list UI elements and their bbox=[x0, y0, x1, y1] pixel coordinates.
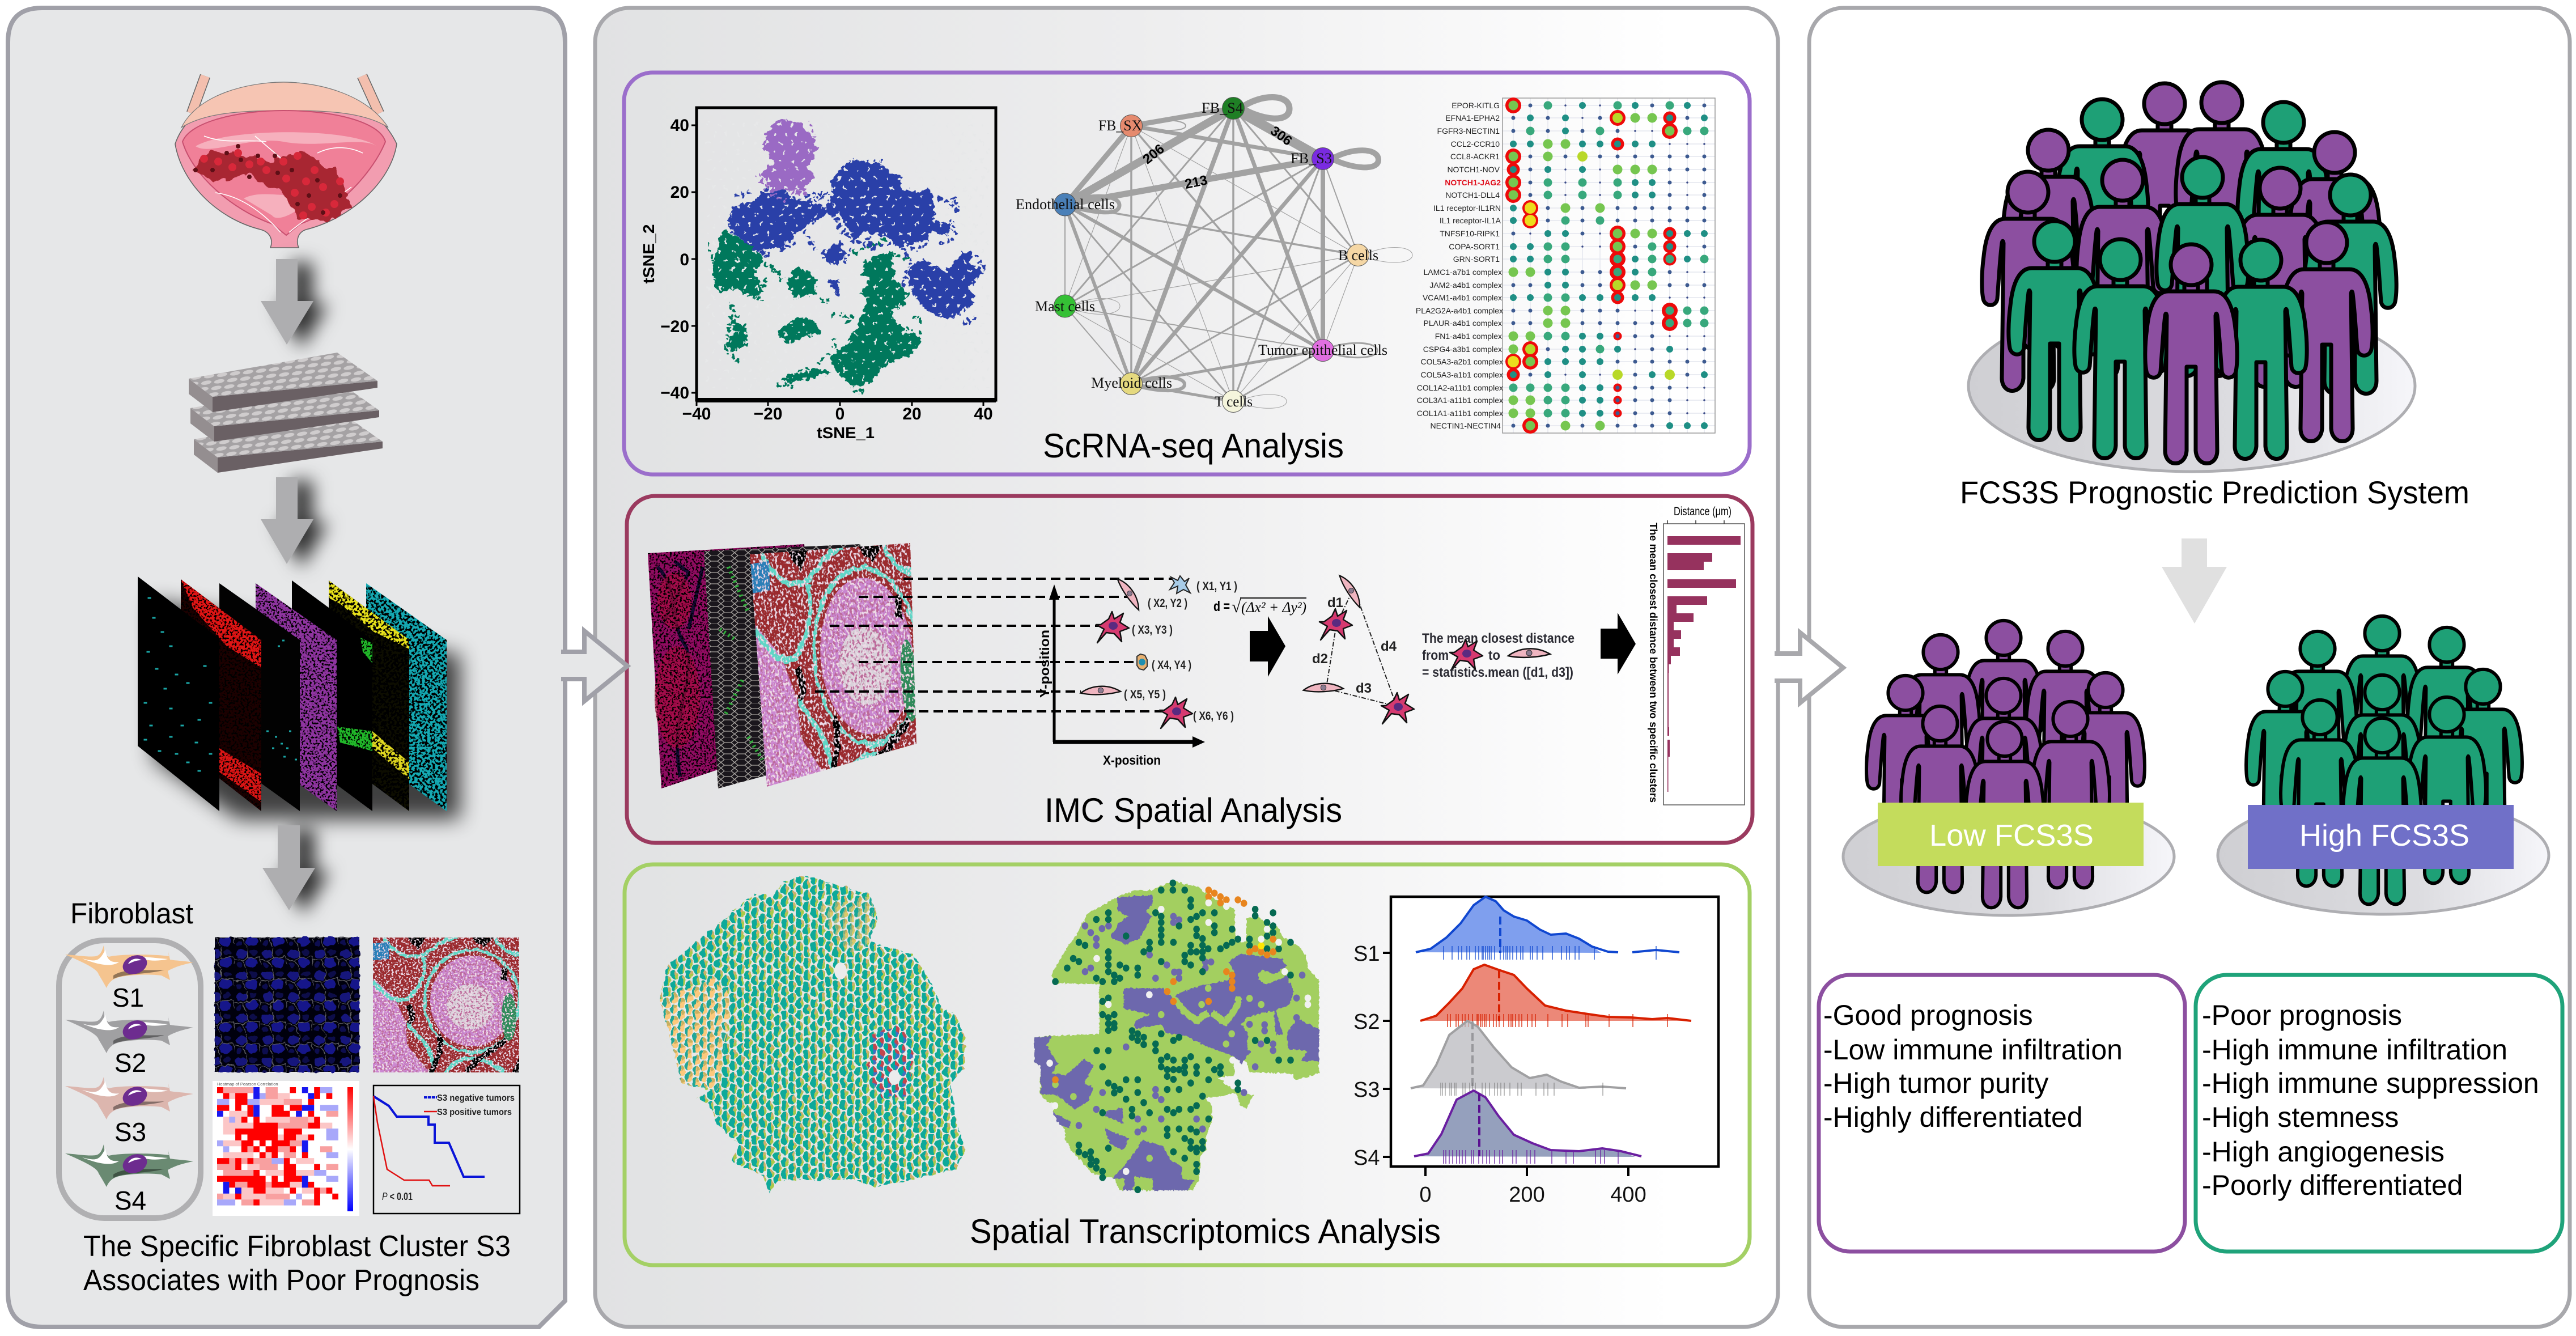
chart: Kaplan-Meier survival curves bbox=[374, 1085, 520, 1214]
ridge axis labels: S2 bbox=[1353, 1010, 1380, 1034]
callout: high FCS3S characteristics bbox=[2196, 975, 2562, 1252]
dot plot row labels: COL5A3-a1b1 complex bbox=[1420, 370, 1503, 379]
speckles on third channel bbox=[266, 641, 297, 760]
XY position axes bbox=[1037, 584, 1205, 767]
chart: spatial cluster hex map bbox=[1034, 881, 1319, 1190]
tSNE axis labels: 40 bbox=[974, 405, 993, 423]
dot plot row labels: JAM2-a4b1 complex bbox=[1429, 281, 1502, 290]
ridge axis labels: S3 bbox=[1353, 1078, 1380, 1102]
arrow: tissue array to imaging channels bbox=[261, 477, 313, 564]
heading: Spatial Transcriptomics Analysis: Spatial Transcriptomics Analysis bbox=[970, 1212, 1441, 1250]
fibroblast S4: S4 bbox=[114, 1186, 146, 1215]
fibroblast S2 bbox=[65, 1011, 193, 1078]
caption: fibroblast cluster finding: The Specific Fibroblast Cluster S3 bbox=[83, 1230, 511, 1263]
illustration: mixed patient cohort bbox=[1968, 82, 2415, 472]
icons: cells with coordinates: ( X6, Y6 ) bbox=[1193, 710, 1234, 723]
label: Low FCS3S: Low FCS3S bbox=[1929, 818, 2094, 853]
network edge weights: 213 bbox=[1183, 172, 1209, 192]
chart: Kaplan-Meier survival curves: S3 positive tumors bbox=[437, 1108, 512, 1117]
callout: low FCS3S characteristics: -Highly differentiated bbox=[1823, 1101, 2083, 1133]
XY position axes: Y-position bbox=[1037, 630, 1052, 698]
chart: mean closest distance bars: The mean closest distance between two specific clusters bbox=[1648, 523, 1659, 803]
dot plot row labels: TNFSF10-RIPK1 bbox=[1440, 229, 1500, 238]
tSNE axis labels: tSNE_1 bbox=[817, 424, 875, 442]
tSNE speckle gaps bbox=[708, 125, 989, 388]
dot plot row labels: COL1A2-a11b1 complex bbox=[1417, 383, 1503, 392]
chart: correlation heatmap: Heatmap of Pearson Correlation bbox=[217, 1081, 278, 1087]
dot plot row labels: IL1 receptor-IL1A bbox=[1440, 216, 1501, 225]
icons: cells with coordinates: ( X1, Y1 ) bbox=[1196, 580, 1237, 593]
dot plot row labels: PLA2G2A-a4b1 complex bbox=[1416, 306, 1503, 315]
tSNE axis labels: 40 bbox=[670, 116, 689, 135]
arrow: bladder to tissue array bbox=[261, 259, 313, 345]
network nodes bbox=[1054, 97, 1369, 413]
ridge axis labels: S1 bbox=[1353, 942, 1380, 966]
dot plot row labels: NECTIN1-NECTIN4 bbox=[1431, 421, 1501, 430]
image stack: IMC tissue layers bbox=[648, 543, 928, 788]
icon: bladder with tumour bbox=[175, 76, 397, 248]
dot plot row labels: GRN-SORT1 bbox=[1453, 255, 1500, 264]
network node labels: FB_S3 bbox=[1291, 150, 1332, 167]
callout: high FCS3S characteristics: -High immune suppression bbox=[2202, 1067, 2539, 1099]
network edge weights: 206 bbox=[1140, 141, 1167, 167]
formula: distance: d = bbox=[1213, 599, 1230, 614]
dot plot row labels: LAMC1-a7b1 complex bbox=[1423, 268, 1502, 277]
ridge axis labels: 400 bbox=[1610, 1183, 1646, 1207]
chart: tSNE scatter plot bbox=[640, 108, 996, 442]
callout: low FCS3S characteristics bbox=[1819, 975, 2185, 1252]
tSNE axis labels: 20 bbox=[670, 183, 689, 202]
arrow: distances to bar chart bbox=[1601, 613, 1636, 675]
arrow: middle panel to right panel bbox=[1775, 633, 1843, 703]
callout: low FCS3S characteristics: -Low immune infiltration bbox=[1823, 1034, 2123, 1066]
callout: high FCS3S characteristics: -Poor prognosis bbox=[2202, 999, 2402, 1031]
callout: low FCS3S characteristics: -High tumor purity bbox=[1823, 1067, 2048, 1099]
network edge weights: 306 bbox=[1267, 123, 1295, 149]
formula: distance: (Δx² + Δy²) bbox=[1241, 599, 1306, 616]
dot plot row labels: CSPG4-a3b1 complex bbox=[1423, 345, 1502, 354]
fibroblast S3: S3 bbox=[114, 1117, 146, 1147]
speckles on first channel bbox=[145, 598, 211, 771]
fibroblast S1 bbox=[65, 945, 193, 1012]
chart: mean closest distance bars: Distance (μm) bbox=[1674, 505, 1732, 518]
dot plot row labels: NOTCH1-NOV bbox=[1447, 165, 1500, 174]
fibroblast S1: S1 bbox=[112, 983, 144, 1012]
arrow: left panel to middle panel bbox=[561, 631, 627, 701]
image: cell segmentation bbox=[215, 938, 359, 1072]
ridge S4 bbox=[1414, 1091, 1641, 1164]
icons: cells with coordinates: ( X4, Y4 ) bbox=[1152, 659, 1191, 672]
network edge weights bbox=[1140, 123, 1295, 192]
panel: ScRNA-seq analysis bbox=[624, 73, 1750, 474]
XY position axes: X-position bbox=[1103, 753, 1161, 767]
chart: ligand-receptor dot plot bbox=[1416, 98, 1715, 433]
network node labels: FB_S4 bbox=[1202, 100, 1243, 116]
diagram: pairwise cell distances: d2 bbox=[1312, 651, 1328, 667]
chart: correlation heatmap bbox=[213, 1081, 359, 1216]
left panel: fibroblast discovery workflow bbox=[8, 8, 565, 1327]
callout: high FCS3S characteristics: -High stemness bbox=[2202, 1101, 2399, 1133]
tSNE axis labels: tSNE_2 bbox=[640, 224, 657, 283]
label: Low FCS3S bbox=[1878, 803, 2144, 866]
network node labels: FB_SX bbox=[1098, 117, 1142, 134]
imaging mass cytometry channel stack bbox=[138, 576, 460, 819]
formula text: mean closest distance bbox=[1422, 631, 1575, 680]
image: cell-type map bbox=[373, 938, 520, 1072]
dot plot row labels: COL3A1-a11b1 complex bbox=[1417, 396, 1503, 405]
dot plot row labels: CCL2-CCR10 bbox=[1451, 139, 1500, 149]
dot plot row labels: NOTCH1-DLL4 bbox=[1445, 190, 1500, 200]
illustration: low FCS3S group bbox=[1843, 621, 2174, 915]
network node labels bbox=[1016, 100, 1387, 410]
tSNE axis labels: −20 bbox=[660, 317, 689, 336]
ridge axis labels: 200 bbox=[1509, 1183, 1545, 1207]
formula text: mean closest distance: The mean closest distance bbox=[1422, 631, 1575, 646]
ridge S1 bbox=[1416, 897, 1679, 960]
arrow: coordinates to pairwise distances bbox=[1250, 616, 1285, 677]
formula text: mean closest distance: = statistics.mean ([d1, d3]) bbox=[1422, 665, 1573, 680]
dot plot row labels: NOTCH1-JAG2 bbox=[1445, 178, 1501, 187]
icons: cells with coordinates: ( X5, Y5 ) bbox=[1124, 688, 1166, 701]
dot plot row labels: IL1 receptor-IL1RN bbox=[1433, 203, 1501, 213]
diagram: pairwise cell distances: d1 bbox=[1327, 595, 1343, 610]
projection lines: cell coordinates bbox=[815, 579, 1173, 711]
callout: high FCS3S characteristics: -High immune infiltration bbox=[2202, 1034, 2507, 1066]
chart: Kaplan-Meier survival curves: S3 negative tumors bbox=[437, 1093, 515, 1103]
right panel: FCS3S prognostic system bbox=[1809, 8, 2570, 1327]
network node labels: Myeloid cells bbox=[1091, 375, 1172, 391]
ridge S2 bbox=[1420, 965, 1691, 1027]
panel: IMC spatial analysis bbox=[627, 496, 1752, 843]
dot plot row labels: COL5A3-a2b1 complex bbox=[1420, 357, 1503, 366]
chart: Kaplan-Meier survival curves: P < 0.01 bbox=[382, 1191, 413, 1202]
dot plot row labels: EPOR-KITLG bbox=[1452, 101, 1500, 110]
ridge axis labels bbox=[1353, 942, 1646, 1207]
network node labels: B cells bbox=[1338, 247, 1378, 264]
diagram: pairwise cell distances bbox=[1304, 572, 1414, 724]
chart: mean closest distance bars bbox=[1648, 505, 1745, 805]
dot plot row labels: EFNA1-EPHA2 bbox=[1445, 113, 1500, 122]
heading: ScRNA-seq Analysis: ScRNA-seq Analysis bbox=[1043, 427, 1344, 465]
callout: low FCS3S characteristics: -Good prognosis bbox=[1823, 999, 2033, 1031]
icon: tissue microarray slides bbox=[189, 353, 383, 473]
tSNE axis labels: 20 bbox=[902, 405, 922, 423]
network node labels: Endothelial cells bbox=[1016, 196, 1115, 213]
formula text: mean closest distance: to bbox=[1488, 648, 1500, 663]
tSNE axis labels: 0 bbox=[835, 405, 844, 423]
dot plot row labels: VCAM1-a4b1 complex bbox=[1423, 293, 1502, 302]
ridge axis labels: 0 bbox=[1419, 1183, 1432, 1207]
illustration: high FCS3S group bbox=[2218, 616, 2549, 914]
caption: fibroblast cluster finding bbox=[83, 1230, 511, 1297]
fibroblast S4 bbox=[65, 1144, 193, 1215]
icons: cells with coordinates bbox=[1081, 575, 1237, 728]
dot plot row labels: FGFR3-NECTIN1 bbox=[1437, 126, 1500, 135]
tSNE axis labels: 0 bbox=[680, 251, 689, 269]
label: High FCS3S: High FCS3S bbox=[2299, 818, 2469, 853]
tSNE axis labels: −40 bbox=[682, 405, 711, 423]
formula text: mean closest distance: from bbox=[1422, 648, 1449, 663]
diagram: pairwise cell distances: d3 bbox=[1356, 681, 1372, 696]
diagram: pairwise cell distances: d4 bbox=[1381, 639, 1397, 654]
heading: FCS3S Prognostic Prediction System: FCS3S Prognostic Prediction System bbox=[1960, 474, 2469, 510]
fibroblast S3 bbox=[65, 1077, 193, 1147]
tSNE axis labels: −20 bbox=[754, 405, 782, 423]
dot plot row labels: CCL8-ACKR1 bbox=[1450, 152, 1500, 161]
arrow: imaging channels to fibroblast results bbox=[262, 825, 315, 910]
formula: distance bbox=[1213, 597, 1306, 616]
caption: fibroblast cluster finding: Associates with Poor Prognosis bbox=[83, 1264, 479, 1297]
chart: cell communication network bbox=[1016, 97, 1412, 412]
dot plot row labels bbox=[1416, 101, 1503, 430]
ridge S3 bbox=[1411, 1021, 1626, 1096]
callout: high FCS3S characteristics: -High angiogenesis bbox=[2202, 1136, 2445, 1168]
icons: cells with coordinates: ( X2, Y2 ) bbox=[1148, 597, 1187, 610]
heading: IMC Spatial Analysis: IMC Spatial Analysis bbox=[1045, 791, 1342, 829]
fibroblast S2: S2 bbox=[114, 1048, 146, 1078]
network node labels: Tumor epithelial cells bbox=[1258, 342, 1387, 358]
chart: spatial pie spots bbox=[657, 873, 969, 1196]
dot plot row labels: COPA-SORT1 bbox=[1449, 242, 1500, 251]
middle panel: multi-omics analyses bbox=[595, 8, 1778, 1327]
network node labels: Mast cells bbox=[1035, 298, 1095, 315]
callout: high FCS3S characteristics: -Poorly differentiated bbox=[2202, 1169, 2463, 1201]
tSNE axis labels bbox=[640, 116, 993, 442]
dot plot row labels: COL1A1-a11b1 complex bbox=[1417, 409, 1503, 418]
network node labels: T cells bbox=[1215, 393, 1253, 410]
scattered tSNE dots bbox=[708, 125, 983, 391]
heading: Fibroblast: Fibroblast bbox=[70, 897, 193, 930]
fibroblast subtypes box bbox=[59, 940, 201, 1218]
label: High FCS3S bbox=[2248, 805, 2514, 869]
panel: spatial transcriptomics analysis bbox=[625, 864, 1750, 1265]
arrow: cohort to risk groups bbox=[2162, 538, 2227, 624]
dot plot row labels: FN1-a4b1 complex bbox=[1435, 332, 1502, 341]
chart: ridgeline density plot bbox=[1353, 897, 1718, 1207]
tSNE axis labels: −40 bbox=[660, 384, 689, 402]
dot plot row labels: PLAUR-a4b1 complex bbox=[1423, 319, 1502, 328]
ridge axis labels: S4 bbox=[1353, 1146, 1380, 1170]
icons: cells with coordinates: ( X3, Y3 ) bbox=[1132, 624, 1173, 637]
formula: distance: √ bbox=[1232, 597, 1241, 616]
